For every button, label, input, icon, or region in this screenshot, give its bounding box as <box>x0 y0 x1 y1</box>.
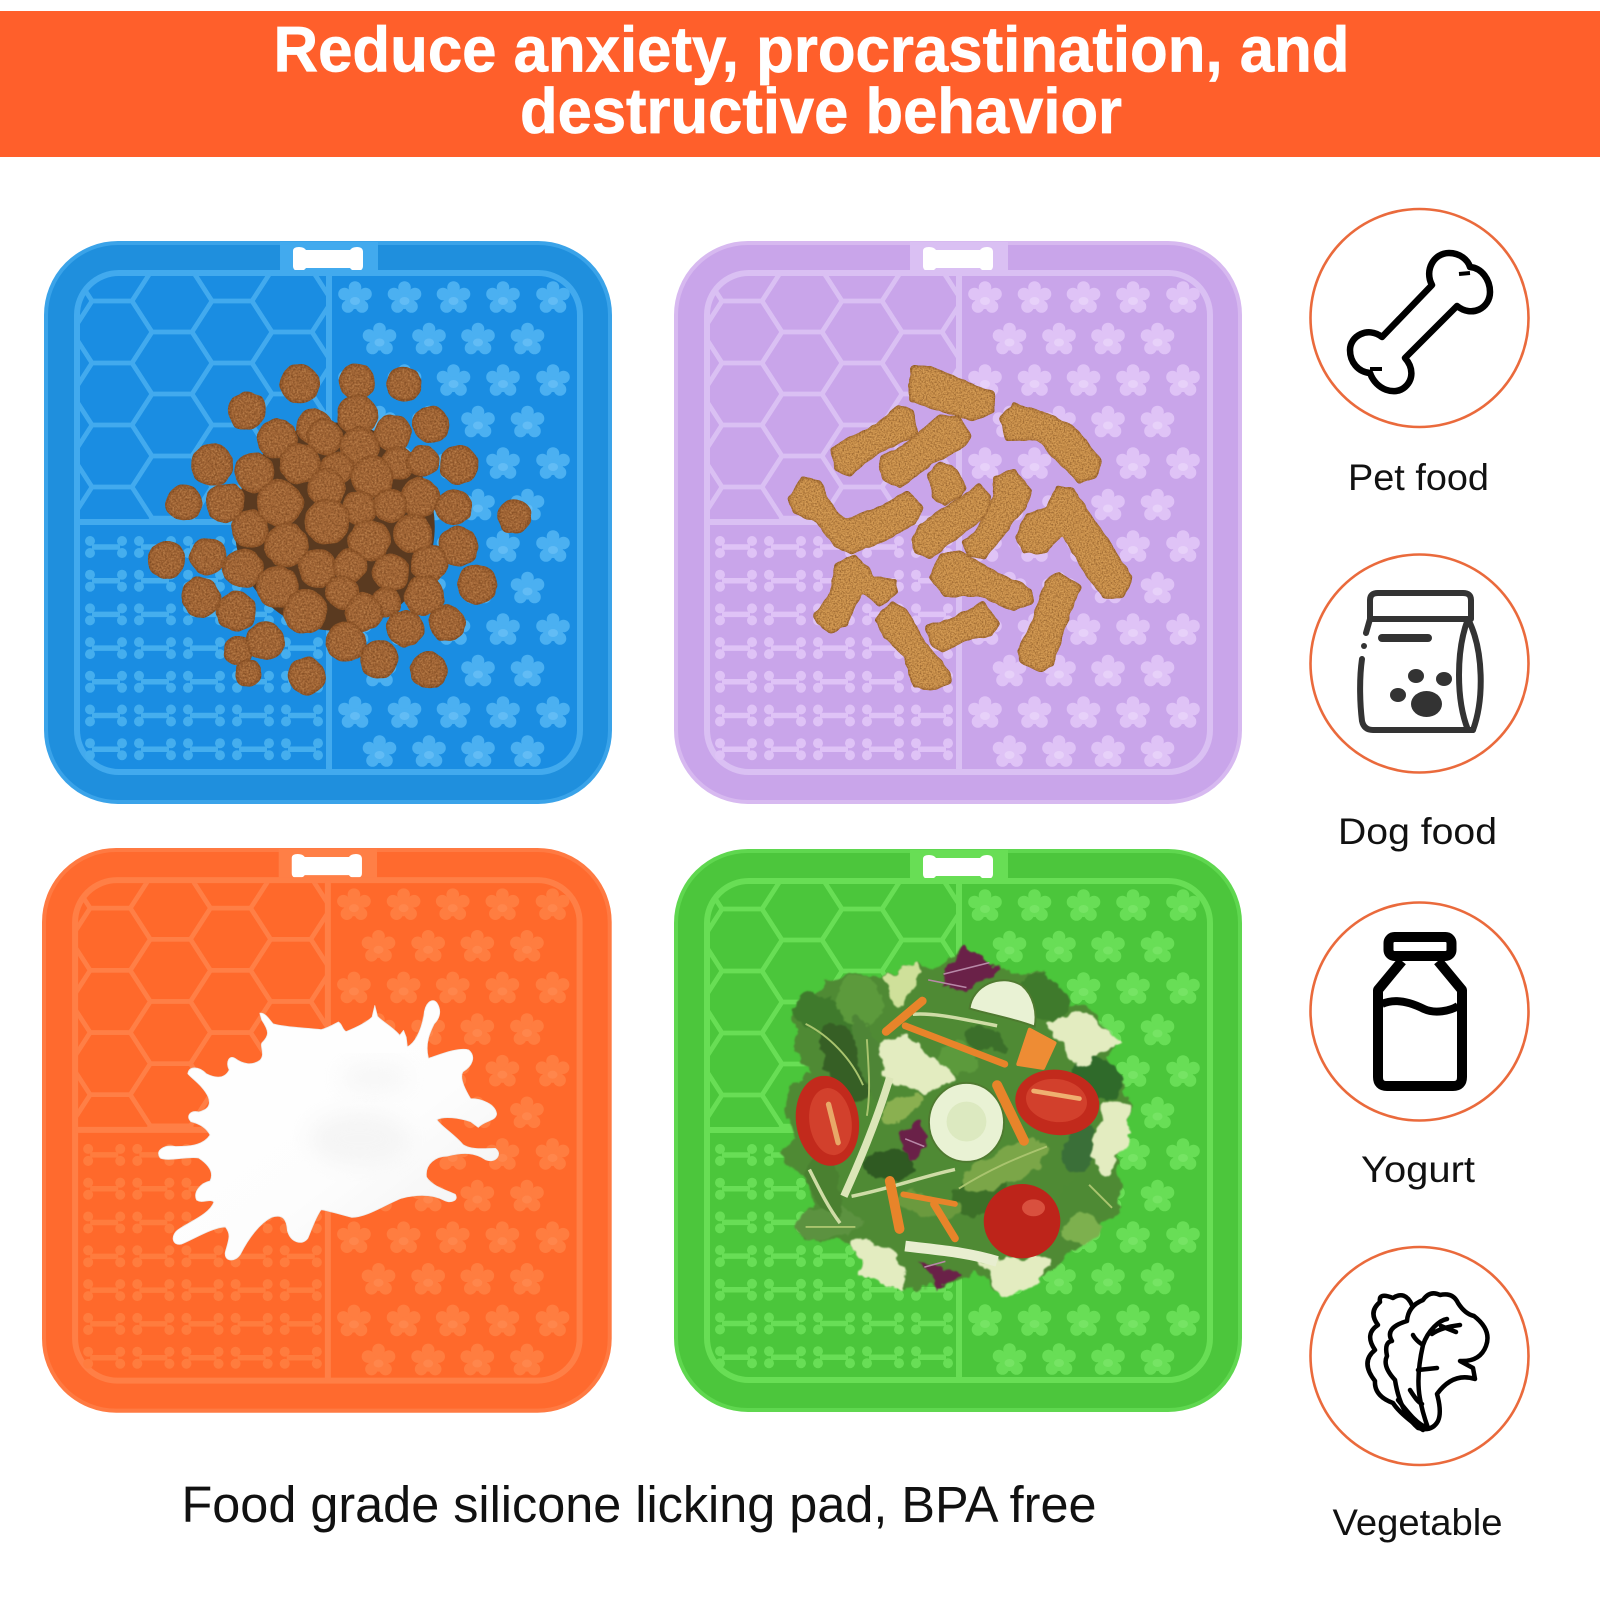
icon: jar <box>1378 937 1462 1086</box>
item: pet food <box>1310 209 1528 498</box>
salad <box>781 945 1131 1296</box>
ring <box>1310 209 1528 427</box>
lettuce pieces <box>853 966 1127 1296</box>
green mat <box>642 847 1240 1410</box>
label: Pet food <box>1348 457 1489 498</box>
ring <box>1310 902 1528 1120</box>
kibble pile <box>147 363 531 694</box>
blue mat <box>12 239 610 802</box>
panel: orange licking mat with milk <box>10 846 610 1411</box>
salad greens <box>781 945 1131 1296</box>
item: dog food <box>1310 554 1528 852</box>
icon: lettuce <box>1368 1293 1488 1430</box>
panel: blue licking mat with kibble <box>12 239 610 802</box>
item: yogurt <box>1310 902 1528 1190</box>
title line one: Reduce anxiety, procrastination, and <box>274 14 1350 86</box>
carrots <box>886 1001 922 1032</box>
panel: purple licking mat with biscuits <box>642 239 1240 802</box>
cucumber slices <box>929 980 1035 1162</box>
stems <box>844 1078 890 1196</box>
panel: green licking mat with salad <box>642 847 1240 1410</box>
label: Dog food <box>1338 811 1497 852</box>
ring <box>1310 1247 1528 1465</box>
bottom caption: Food grade silicone licking pad, BPA free <box>182 1476 1096 1533</box>
bone-shaped biscuits <box>791 367 1131 687</box>
label: Yogurt <box>1361 1149 1476 1190</box>
purple cabbage <box>901 945 1001 1288</box>
tomatoes <box>790 1072 865 1170</box>
milk splash <box>159 1001 499 1260</box>
purple mat <box>642 239 1240 802</box>
label: Vegetable <box>1332 1502 1502 1543</box>
title banner <box>0 11 1600 157</box>
orange mat <box>10 846 610 1411</box>
item: vegetable <box>1310 1247 1528 1543</box>
icon: bone <box>1350 253 1490 391</box>
icon: food bag <box>1360 593 1481 730</box>
ring <box>1310 554 1528 772</box>
title line two: destructive behavior <box>520 75 1122 147</box>
